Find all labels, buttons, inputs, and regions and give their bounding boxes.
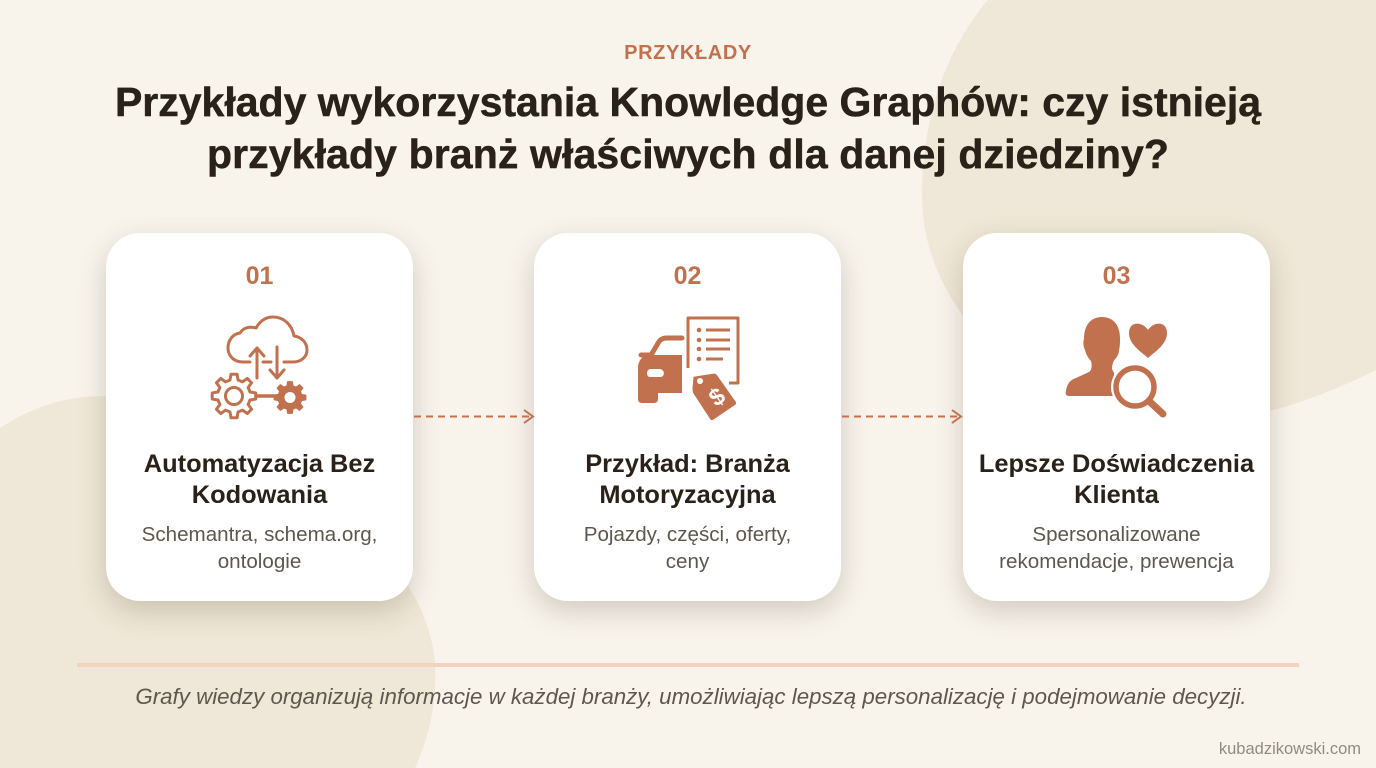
icon: car, document and price tag [638,318,738,422]
card 1 heading: Kodowania [192,481,327,509]
card 1 heading [144,450,375,509]
title: przykłady branż właściwych dla danej dziedziny? [207,131,1169,177]
card 1 description: ontologie [218,550,301,573]
eyebrow label: PRZYKŁADY [624,42,752,64]
card 3 heading [979,450,1254,509]
card 3 description: rekomendacje, prewencja [999,550,1234,573]
card 1 description: Schemantra, schema.org, [142,523,377,546]
icon: person, heart and magnifier [1066,317,1167,414]
card 2 heading: Motoryzacyjna [599,481,776,509]
divider line [77,663,1299,667]
card 2 description: ceny [666,550,709,573]
arrow: card 2 to card 3 [842,410,961,423]
card 2 heading [585,450,790,509]
title [115,79,1262,177]
card 2 [534,233,841,601]
icon: car, document and price tag: $ [704,382,731,412]
footer statement: Grafy wiedzy organizują informacje w każdej branży, umożliwiając lepszą personalizację i podejmowanie decyzji. [135,684,1247,709]
card 3 [963,233,1270,601]
card 3 heading: Lepsze Doświadczenia [979,450,1254,478]
card 1 [106,233,413,601]
card 2 number: 02 [674,262,701,290]
card 1 description [142,523,377,573]
card 2 heading: Przykład: Branża [585,450,790,478]
card 1 number: 01 [246,262,273,290]
card 3 heading: Klienta [1074,481,1159,509]
card 2 description: Pojazdy, części, oferty, [584,523,791,546]
card 3 description: Spersonalizowane [1032,523,1201,546]
card 2 description [584,523,791,573]
icon: cloud with arrows and gears [212,317,307,418]
card 3 number: 03 [1103,262,1130,290]
arrow: card 1 to card 2 [414,410,533,423]
title: Przykłady wykorzystania Knowledge Graphów: czy istnieją [115,79,1261,125]
watermark: kubadzikowski.com [1219,740,1361,758]
card 1 heading: Automatyzacja Bez [144,450,375,478]
card 3 description [999,523,1234,573]
